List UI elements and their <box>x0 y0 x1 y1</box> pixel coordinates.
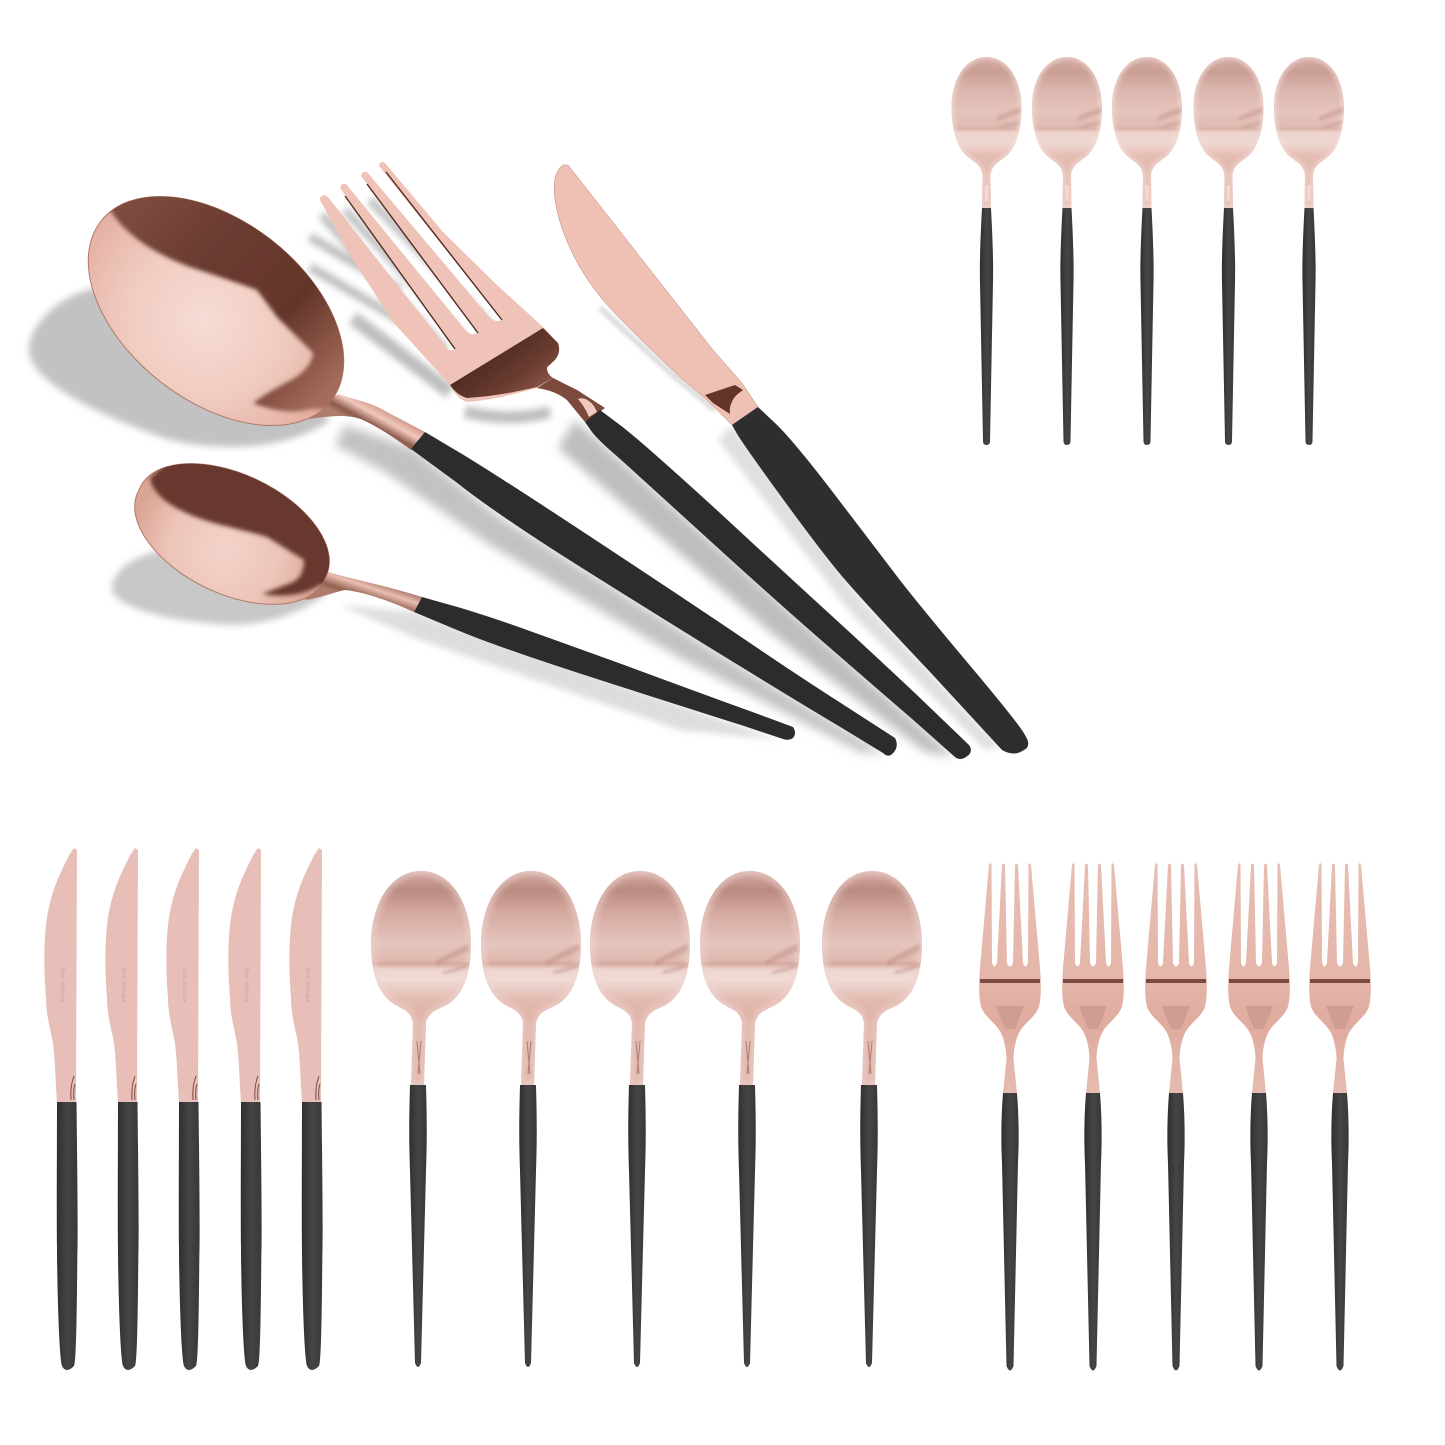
knife handle <box>732 407 1028 754</box>
fork head dark band <box>450 328 559 398</box>
knife 3 <box>166 848 200 1370</box>
row: five small spoons top right <box>952 57 1344 445</box>
row: five forks bottom right <box>979 863 1371 1370</box>
fork 5 <box>1309 863 1371 1370</box>
fork 1 <box>979 863 1041 1370</box>
teaspoon bowl <box>135 464 329 604</box>
spoon neck <box>300 394 425 450</box>
featured cutlery group <box>29 162 1028 759</box>
fork neck shading <box>537 378 605 422</box>
fork handle <box>585 410 971 759</box>
teaspoon neck <box>305 570 422 612</box>
cast shadows <box>29 200 1000 757</box>
spoon 2 <box>481 871 581 1367</box>
knife bolster reflection <box>705 385 743 414</box>
large fork <box>320 162 971 759</box>
fork slot dark edges <box>345 172 502 349</box>
knife blade <box>554 165 758 425</box>
small spoon 2 <box>1032 57 1102 445</box>
small spoon 4 <box>1194 57 1264 445</box>
fork 3 <box>1145 863 1207 1370</box>
small spoon 3 <box>1112 57 1182 445</box>
spoon handle <box>411 432 897 756</box>
spoon 1 <box>371 871 471 1367</box>
small spoon 5 <box>1274 57 1344 445</box>
teaspoon handle <box>414 597 795 740</box>
small table spoon <box>135 450 795 740</box>
large serving spoon <box>88 175 897 756</box>
large knife <box>554 165 1028 754</box>
fork neck highlight <box>578 398 597 417</box>
spoon 4 <box>700 871 800 1367</box>
knife 2 <box>105 848 139 1370</box>
row: five spoons bottom centre <box>371 871 922 1367</box>
knife 5 <box>289 848 323 1370</box>
fork head, tines and neck <box>320 162 605 422</box>
knife 1 <box>44 848 78 1370</box>
spoon bowl <box>88 196 344 426</box>
row: five knives bottom left <box>44 848 323 1370</box>
spoon bowl dark reflection <box>109 196 344 414</box>
spoon 5 <box>822 871 922 1367</box>
teaspoon bowl dark reflection <box>147 464 330 599</box>
knife 4 <box>228 848 262 1370</box>
small spoon 1 <box>952 57 1022 445</box>
fork 4 <box>1228 863 1290 1370</box>
fork 2 <box>1062 863 1124 1370</box>
spoon 3 <box>590 871 690 1367</box>
